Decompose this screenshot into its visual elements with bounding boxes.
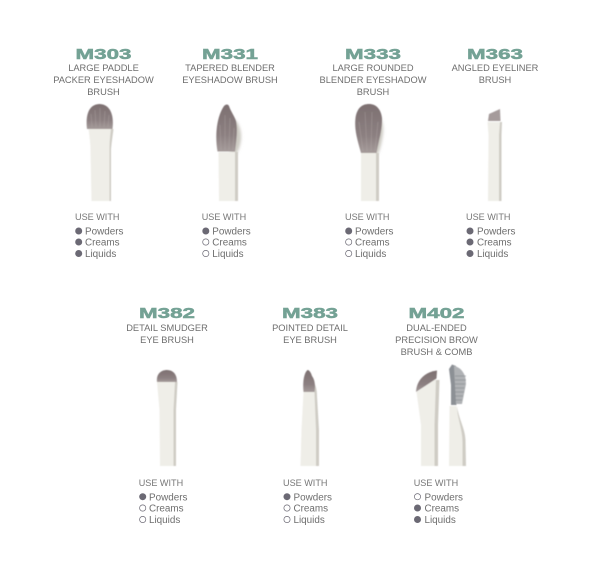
description: M402: PRECISION BROW [395,335,478,345]
usage list: M382: Powders [149,492,187,503]
icon: brow comb [449,364,466,466]
description: M331: TAPERED BLENDER [185,63,275,73]
usage list: M331 [202,212,251,260]
usage list: M402: Creams [424,504,459,515]
usage list: M383: Creams [294,504,328,515]
usage list: M363: Creams [477,238,512,249]
panel: M331 [182,47,278,260]
usage list: M303: Creams [85,238,120,249]
icon: large rounded blender brush [355,104,383,201]
usage list: M333: Liquids [355,249,386,260]
description: M303: BRUSH [87,87,120,97]
usage list: M303: Liquids [85,249,116,260]
title: M383: M383 [282,306,338,322]
title: M363: M363 [467,47,523,63]
usage list: M363 [466,212,515,260]
description: M402: BRUSH & COMB [401,347,472,357]
usage list: M382 [139,478,187,526]
description: M333: LARGE ROUNDED [332,63,414,73]
title: M382: M382 [139,306,195,322]
usage list: M382: USE WITH [139,478,183,488]
usage list: M402: USE WITH [414,478,458,488]
usage list: M331: Powders [212,226,251,238]
usage list: M363: Powders [477,226,515,238]
icon: pointed detail brush [300,370,319,466]
usage list: M363: Liquids [477,249,508,260]
description: M331: EYESHADOW BRUSH [182,75,278,85]
panel: M333 [320,47,427,260]
usage list: M333: Creams [355,238,390,249]
usage list: M303: Powders [85,226,123,238]
usage list: M363: USE WITH [466,212,510,222]
panel: M382 [126,306,208,526]
description: M402: DUAL-ENDED [406,323,467,333]
title: M333: M333 [345,47,401,63]
title: M303: M303 [76,47,132,63]
usage list: M333: USE WITH [345,212,389,222]
panel: M402 [395,306,478,526]
description: M333: BLENDER EYESHADOW [320,75,427,85]
icon: dual-ended brow brush [416,370,440,466]
usage list: M383: USE WITH [283,478,327,488]
usage list: M303: USE WITH [75,212,119,222]
description: M383: EYE BRUSH [283,335,337,345]
title: M331: M331 [202,47,258,63]
usage list: M383 [283,478,332,526]
usage list: M333: Powders [355,226,393,238]
usage list: M402: Liquids [424,515,456,526]
description: M303: LARGE PADDLE [68,63,139,73]
panel: M303 [53,47,154,260]
description: M382: DETAIL SMUDGER [126,323,208,333]
icon: large paddle brush [87,104,114,201]
usage list: M402: Powders [424,492,463,503]
description: M333: BRUSH [357,87,389,97]
usage list: M383: Powders [294,492,332,503]
description: M383: POINTED DETAIL [272,323,348,333]
usage list: M331: Liquids [212,249,244,260]
usage list: M331: Creams [212,238,247,249]
icon: tapered blender brush [216,104,241,201]
usage list: M383: Liquids [294,515,325,526]
title: M402: M402 [408,306,464,322]
usage list: M382: Liquids [149,515,180,526]
icon: angled eyeliner brush [488,109,502,201]
usage list: M303 [75,212,123,260]
usage list: M331: USE WITH [202,212,246,222]
usage list: M402 [414,478,463,526]
description: M303: PACKER EYESHADOW [53,75,154,85]
panel: M363 [452,47,539,260]
panel: M383 [272,306,348,526]
description: M382: EYE BRUSH [140,335,194,345]
usage list: M382: Creams [149,504,184,515]
description: M363: BRUSH [479,75,511,85]
description: M363: ANGLED EYELINER [452,63,539,73]
usage list: M333 [345,212,393,260]
icon: detail smudger brush [157,370,178,466]
